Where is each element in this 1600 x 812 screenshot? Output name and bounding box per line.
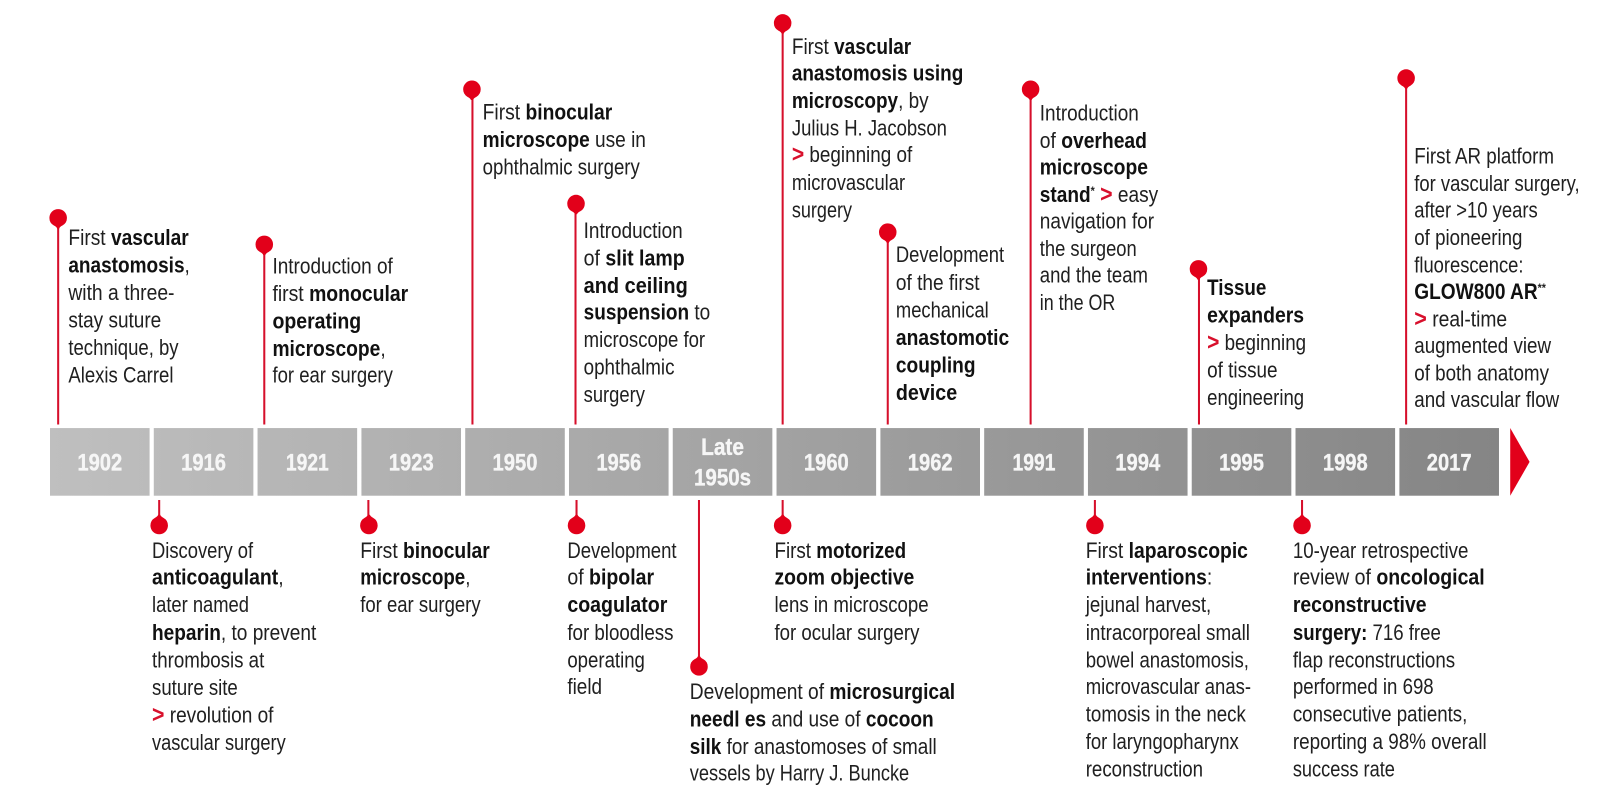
text: technique, by	[68, 335, 179, 360]
year box: 1991	[984, 428, 1084, 496]
year box: 1916: 1916	[181, 449, 226, 476]
text: microscope,	[272, 336, 386, 361]
text: microscope for	[584, 327, 705, 352]
text: ophthalmic	[584, 354, 675, 379]
text: of tissue	[1207, 358, 1278, 383]
event: 1902 vascular anastomosis	[49, 209, 190, 424]
text: microscope use in	[483, 127, 646, 152]
marker	[567, 195, 585, 424]
marker	[1086, 500, 1104, 534]
text: anastomosis,	[68, 252, 190, 277]
text: fluorescence:	[1414, 252, 1523, 277]
event: 1994 laparoscopic interventions	[1085, 500, 1251, 782]
event: 1960 motorized zoom objective	[774, 500, 929, 645]
text: operating	[567, 647, 645, 672]
year box: 1950: 1950	[493, 449, 537, 476]
text: > real-time	[1414, 306, 1507, 333]
event: 1921 monocular microscope	[256, 236, 409, 424]
text: expanders	[1207, 302, 1304, 327]
text: jejunal harvest,	[1085, 592, 1211, 617]
marker	[1397, 69, 1415, 424]
text: for ear surgery	[360, 592, 481, 617]
text: Discovery of	[152, 538, 254, 563]
year box: 1921: 1921	[286, 449, 329, 476]
year box: 1923: 1923	[389, 449, 434, 476]
text: of slit lamp	[584, 245, 685, 270]
text: reconstruction	[1086, 757, 1203, 782]
text: > easy	[1100, 181, 1165, 208]
year box: 1995	[1192, 428, 1291, 496]
text: and the team	[1040, 263, 1148, 288]
marker	[463, 81, 481, 424]
arrow	[1510, 428, 1530, 496]
text: stand	[1040, 182, 1091, 207]
year box: 1994: 1994	[1115, 449, 1161, 476]
event: 1916 heparin	[150, 500, 316, 755]
marker	[360, 500, 378, 534]
text: for ear surgery	[272, 363, 393, 388]
marker	[49, 209, 67, 424]
marker	[690, 500, 708, 676]
text: flap reconstructions	[1293, 647, 1455, 672]
text	[152, 538, 316, 755]
year box: Late 1950s: Late	[701, 434, 744, 461]
year box: 1956: 1956	[596, 449, 641, 476]
text: for laryngopharynx	[1086, 729, 1239, 754]
text: First binocular	[360, 538, 490, 563]
text: First binocular	[483, 99, 613, 124]
year box: Late 1950s	[673, 428, 772, 496]
text: of bipolar	[567, 565, 654, 590]
text: surgery	[584, 382, 645, 407]
year box: 1921	[258, 428, 357, 496]
marker	[1022, 81, 1039, 424]
text: for bloodless	[567, 620, 674, 645]
year box: 1991: 1991	[1013, 449, 1055, 476]
year box: Late 1950s: 1950s	[694, 465, 751, 492]
year box: 2017	[1399, 428, 1499, 496]
marker	[1293, 500, 1311, 534]
text	[1207, 275, 1306, 410]
text: navigation for	[1040, 209, 1154, 234]
text: augmented view	[1414, 333, 1551, 358]
text: review of oncological	[1293, 565, 1485, 590]
text	[483, 99, 646, 179]
text: Development	[896, 242, 1004, 267]
text: Alexis Carrel	[68, 363, 173, 388]
text: first monocular	[272, 281, 409, 306]
text: and vascular flow	[1414, 387, 1559, 412]
text: for ocular surgery	[774, 620, 919, 645]
text: microscope,	[360, 565, 470, 590]
text: Introduction	[1040, 100, 1139, 125]
text: of pioneering	[1414, 225, 1522, 250]
event: 2017 GLOW800 AR	[1397, 69, 1580, 424]
text: First motorized	[774, 538, 906, 563]
text	[272, 253, 409, 388]
text	[1414, 143, 1580, 412]
text	[1040, 100, 1158, 315]
year box: 1962	[880, 428, 980, 496]
text: reporting a 98% overall	[1293, 729, 1487, 754]
text: tomosis in the neck	[1086, 701, 1246, 726]
text: after >10 years	[1414, 197, 1538, 222]
text: of overhead	[1040, 128, 1147, 153]
timeline bar	[50, 428, 1530, 496]
text: microscope	[1040, 154, 1148, 179]
year box: 1923	[361, 428, 461, 496]
text: bowel anastomosis,	[1086, 647, 1249, 672]
year box: 1950	[465, 428, 565, 496]
text: thrombosis at	[152, 647, 264, 672]
event: 1998 oncological reconstructive surgery	[1293, 500, 1487, 782]
text: surgery: 716 free	[1293, 620, 1441, 645]
event: 1956 bipolar coagulator	[567, 500, 677, 699]
text: consecutive patients,	[1293, 701, 1467, 726]
text: performed in 698	[1293, 674, 1434, 699]
text: silk for anastomoses of small	[690, 734, 937, 759]
text: microvascular	[792, 170, 905, 195]
text: success rate	[1293, 757, 1395, 782]
text: First laparoscopic	[1086, 538, 1248, 563]
text: coupling	[896, 352, 976, 377]
text: Introduction	[584, 218, 683, 243]
text	[896, 242, 1009, 405]
text: > revolution of	[152, 701, 274, 728]
text: coagulator	[567, 592, 668, 617]
text: GLOW800 AR	[1414, 279, 1538, 304]
text: mechanical	[896, 297, 989, 322]
text: Development	[567, 538, 677, 563]
year box: 1995: 1995	[1219, 449, 1264, 476]
event: 1956 slit lamp	[567, 195, 710, 424]
text: of the first	[896, 270, 980, 295]
marker	[774, 14, 791, 424]
event: 1991 overhead microscope stand	[1022, 81, 1158, 424]
text: vessels by Harry J. Buncke	[690, 761, 909, 786]
marker	[879, 223, 897, 424]
text: operating	[272, 309, 361, 334]
text	[1293, 538, 1487, 782]
event: 1923 binocular microscope for ear surgery	[360, 500, 490, 617]
event: 1960 vascular anastomosis using microscopy	[774, 14, 963, 424]
text: suspension to	[584, 299, 710, 324]
marker	[1190, 260, 1207, 424]
marker	[568, 500, 585, 534]
text	[584, 218, 710, 407]
text: zoom objective	[774, 565, 914, 590]
text: suture site	[152, 675, 238, 700]
event: Late 1950s microsurgical needles	[690, 500, 955, 786]
text: surgery	[792, 197, 852, 222]
text: lens in microscope	[774, 592, 929, 617]
text: engineering	[1207, 385, 1304, 410]
text: with a three-	[67, 280, 174, 305]
text: ophthalmic surgery	[483, 154, 640, 179]
text: and ceiling	[584, 273, 688, 298]
text: intracorporeal small	[1086, 620, 1250, 645]
text	[774, 538, 929, 645]
text: the surgeon	[1040, 236, 1137, 261]
text: anastomotic	[896, 325, 1009, 350]
year box: 1998: 1998	[1323, 449, 1368, 476]
text: First vascular	[792, 34, 912, 59]
text	[1085, 538, 1251, 782]
text: heparin, to prevent	[152, 620, 316, 645]
text	[690, 679, 955, 786]
year box: 1902: 1902	[77, 449, 122, 476]
marker	[256, 236, 273, 424]
event: 1995 tissue expanders	[1190, 260, 1306, 424]
marker	[150, 500, 168, 534]
text: anastomosis using	[792, 61, 963, 86]
text	[792, 34, 963, 222]
text: > beginning of	[792, 141, 913, 168]
text: Introduction of	[272, 253, 394, 278]
year box: 1962: 1962	[908, 449, 953, 476]
text: Development of microsurgical	[690, 679, 955, 704]
text: Tissue	[1207, 275, 1266, 300]
text: vascular surgery	[152, 730, 286, 755]
text	[567, 538, 677, 699]
text: 10-year retrospective	[1293, 538, 1468, 563]
text: of both anatomy	[1414, 361, 1549, 386]
event: 1962 anastomotic coupling device	[879, 223, 1009, 424]
text: > beginning	[1207, 329, 1306, 356]
text	[67, 225, 190, 388]
year box: 1916	[154, 428, 253, 496]
text: *	[1091, 184, 1095, 198]
text: microvascular anas-	[1086, 674, 1251, 699]
year box: 1956	[569, 428, 669, 496]
event: 1950 binocular microscope	[463, 81, 646, 424]
text: later named	[152, 592, 249, 617]
year box: 1994	[1088, 428, 1188, 496]
text: in the OR	[1040, 290, 1115, 315]
year box: 1998	[1296, 428, 1395, 496]
text: First AR platform	[1414, 143, 1554, 168]
year box: 2017: 2017	[1427, 449, 1472, 476]
text	[360, 538, 490, 617]
text: microscopy, by	[792, 88, 929, 113]
text: **	[1538, 281, 1546, 295]
text: device	[896, 380, 957, 405]
year box: 1960	[777, 428, 876, 496]
text: needl es and use of cocoon	[690, 707, 934, 732]
year box: 1960: 1960	[804, 449, 849, 476]
text: stay suture	[68, 308, 161, 333]
marker	[774, 500, 791, 534]
text: Julius H. Jacobson	[792, 116, 947, 141]
text: anticoagulant,	[152, 565, 284, 590]
text: First vascular	[68, 225, 189, 250]
text: interventions:	[1086, 565, 1212, 590]
text: field	[567, 674, 602, 699]
year box: 1902	[50, 428, 150, 496]
text: reconstructive	[1293, 592, 1427, 617]
